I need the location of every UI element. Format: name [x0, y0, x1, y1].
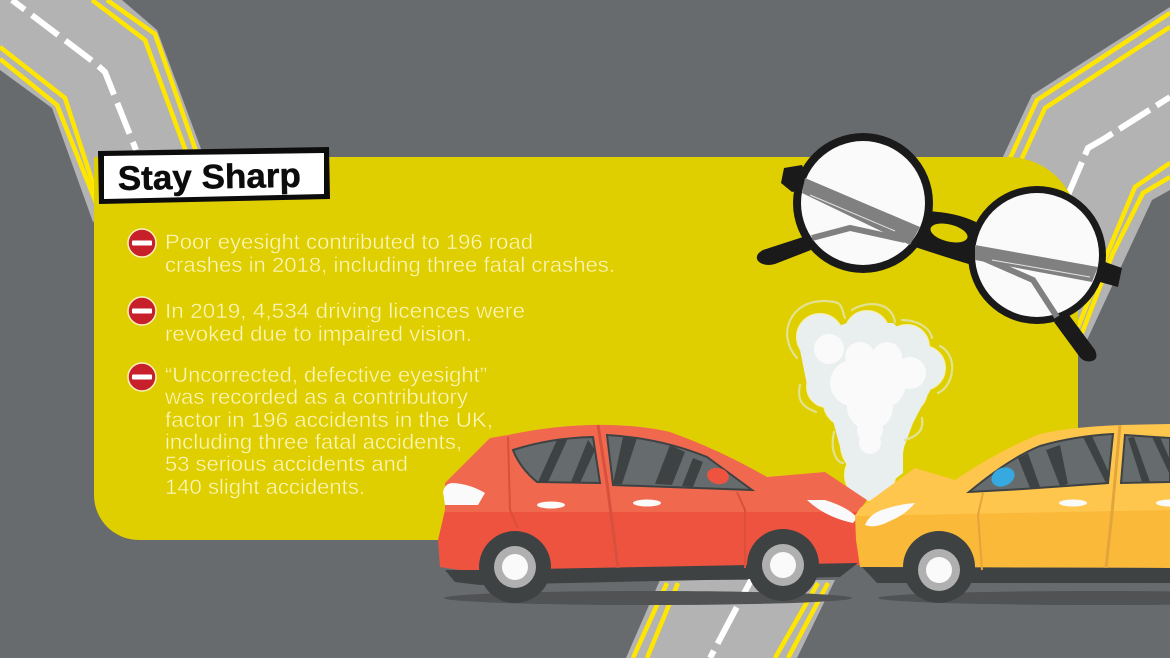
text: eyesight crashes: Poor eyesight contributed to 196 road [165, 231, 533, 254]
left temple arm [757, 237, 811, 265]
road: top right [985, 7, 1170, 340]
lower body [855, 508, 1170, 568]
text: licences revoked: In 2019, 4,534 driving licences were [165, 300, 525, 323]
rear window [1121, 435, 1170, 483]
door lines [508, 425, 745, 568]
skirt [445, 563, 858, 585]
text: eyesight crashes: crashes in 2018, including three fatal crashes. [165, 254, 615, 277]
red car [438, 425, 867, 605]
front wheel [747, 529, 819, 601]
icon: no entry sign [128, 363, 156, 391]
text: contributory factor: 140 slight accidents. [165, 476, 365, 499]
smoke outer puffs [797, 311, 945, 500]
skirt [862, 567, 1170, 583]
panel: yellow background [94, 157, 1078, 540]
smoke motion lines [787, 301, 952, 463]
bullet 1 [128, 229, 615, 277]
text: contributory factor: factor in 196 accidents in the UK, [165, 409, 493, 432]
door lines [978, 425, 1120, 570]
smoke cloud [787, 301, 952, 500]
right temple arm [1054, 315, 1096, 361]
yellow car [855, 424, 1170, 605]
text: contributory factor: “Uncorrected, defective eyesight” [165, 364, 487, 387]
bullet 3 [128, 363, 499, 499]
rear wheel [479, 531, 551, 603]
icon: no entry sign [128, 229, 156, 257]
smoke inner puffs [814, 334, 926, 454]
rear window [513, 437, 600, 483]
road: bottom [626, 567, 835, 658]
bridge [912, 211, 976, 265]
upper body [445, 425, 867, 512]
heading: Stay Sharp sign [98, 147, 330, 204]
text: contributory factor: 53 serious accidents and [165, 453, 408, 476]
lights and handles [865, 500, 1170, 526]
text: contributory factor: including three fatal accidents, [165, 431, 462, 454]
text: contributory factor: was recorded as a contributory [164, 386, 469, 409]
car shadow [444, 591, 852, 605]
hinges [781, 165, 1122, 287]
icon: no entry sign [128, 297, 156, 325]
icon: glasses [757, 133, 1122, 361]
lower body [438, 510, 860, 573]
front window [969, 434, 1113, 492]
upper body [855, 424, 1170, 516]
heading: Stay Sharp sign: Stay Sharp [117, 157, 301, 198]
road: top left [0, 0, 204, 222]
bullet 2 [128, 297, 531, 346]
wheel [903, 531, 975, 603]
lights and handles [443, 483, 857, 523]
right lens [968, 186, 1106, 324]
front window [607, 435, 752, 490]
text: licences revoked: revoked due to impaired vision. [165, 323, 472, 346]
car shadow [878, 591, 1170, 605]
left lens [793, 133, 933, 273]
